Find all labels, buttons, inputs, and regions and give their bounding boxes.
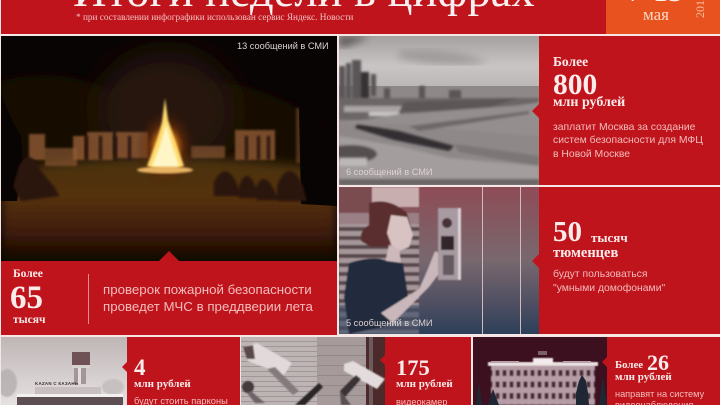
description <box>553 269 665 294</box>
panel: 4 million <box>127 337 240 405</box>
panel: 65 thousand <box>1 261 337 335</box>
date badge <box>606 0 720 34</box>
unit: млн рублей <box>396 378 453 390</box>
panel: 50 thousand <box>539 187 720 334</box>
number: 26 <box>647 350 669 375</box>
photo: campfire <box>1 36 337 261</box>
photo: airport <box>1 337 127 405</box>
panel: 175 million <box>385 337 471 405</box>
caption: 6 сообщений в СМИ <box>346 167 433 177</box>
photo: cameras <box>241 337 385 405</box>
caption: 5 сообщений в СМИ <box>346 318 433 328</box>
description: направят на систему <box>615 389 704 399</box>
unit: тысяч <box>13 314 45 326</box>
description: проверок пожарной безопасности <box>103 282 312 297</box>
panel: 26 million <box>607 337 720 405</box>
footnote: * при составлении инфографики использован сервис Яндекс. Новости <box>76 13 353 23</box>
header bar <box>1 0 606 34</box>
caption: 13 сообщений в СМИ <box>237 41 329 51</box>
description: систем безопасности для МФЦ <box>553 135 703 146</box>
number: 65 <box>10 280 43 316</box>
description <box>553 122 703 160</box>
pointer <box>602 357 607 367</box>
number: 175 <box>396 355 430 380</box>
photo: intercom <box>339 187 539 334</box>
unit: млн рублей <box>134 378 191 390</box>
pointer <box>532 254 539 268</box>
sign: KAZAN С КАЗАНЬ <box>35 381 78 386</box>
month: мая <box>643 5 669 24</box>
subject: тюменцев <box>553 245 618 261</box>
pointer <box>380 355 385 365</box>
description <box>615 389 704 405</box>
number: 50 <box>553 216 582 248</box>
unit: млн рублей <box>615 371 672 383</box>
description: заплатит Москва за создание <box>553 122 695 133</box>
description: будут пользоваться <box>553 269 648 280</box>
pointer <box>122 362 127 372</box>
description <box>103 282 313 314</box>
photo: government building <box>473 337 607 405</box>
unit: млн рублей <box>553 95 625 110</box>
number: 4 <box>134 355 146 380</box>
photo: Moscow <box>339 36 539 185</box>
description: проведет МЧС в преддверии лета <box>103 299 313 314</box>
number: 800 <box>553 69 597 101</box>
label: Более <box>13 268 43 280</box>
panel: 800 million <box>539 36 720 185</box>
label: Более <box>553 54 588 69</box>
label: Более <box>615 359 643 371</box>
pointer <box>532 104 539 118</box>
divider <box>88 274 89 324</box>
description: "умными домофонами" <box>553 283 665 294</box>
pointer <box>159 251 179 261</box>
unit: тысяч <box>591 230 628 245</box>
description: в Новой Москве <box>553 149 630 160</box>
